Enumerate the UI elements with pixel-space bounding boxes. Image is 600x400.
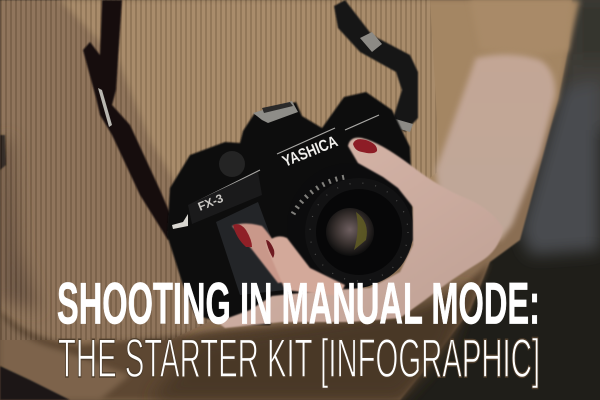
brand label YASHICA: YASHICA [280, 133, 341, 171]
middle finger [266, 236, 345, 296]
camera dial [219, 151, 245, 177]
model plate [188, 172, 262, 224]
model label FX-3: FX-3 [196, 191, 226, 214]
nail: thumb [353, 139, 377, 153]
grip [216, 202, 285, 295]
lower sweater band [0, 262, 490, 400]
hand [217, 138, 503, 328]
side flash bracket [172, 214, 188, 229]
strap ring [360, 32, 413, 132]
sleeve fold [470, 0, 572, 55]
index finger [232, 224, 290, 283]
right blurred backdrop [520, 0, 600, 255]
lens [287, 163, 413, 289]
dark corner [0, 366, 70, 400]
hot shoe [253, 101, 298, 123]
thumb and palm [217, 138, 503, 328]
upper chest sweater, lighter [60, 0, 580, 240]
nail: index [233, 224, 252, 247]
title [57, 272, 540, 389]
left sweater shading [0, 140, 40, 310]
knit texture [0, 0, 440, 340]
camera body [167, 92, 414, 325]
right strap [334, 0, 418, 132]
strap buckle [98, 88, 112, 127]
left strap [83, 0, 178, 240]
forearm [436, 54, 555, 240]
nail: middle [266, 240, 274, 258]
camera top plate lines [190, 115, 379, 205]
